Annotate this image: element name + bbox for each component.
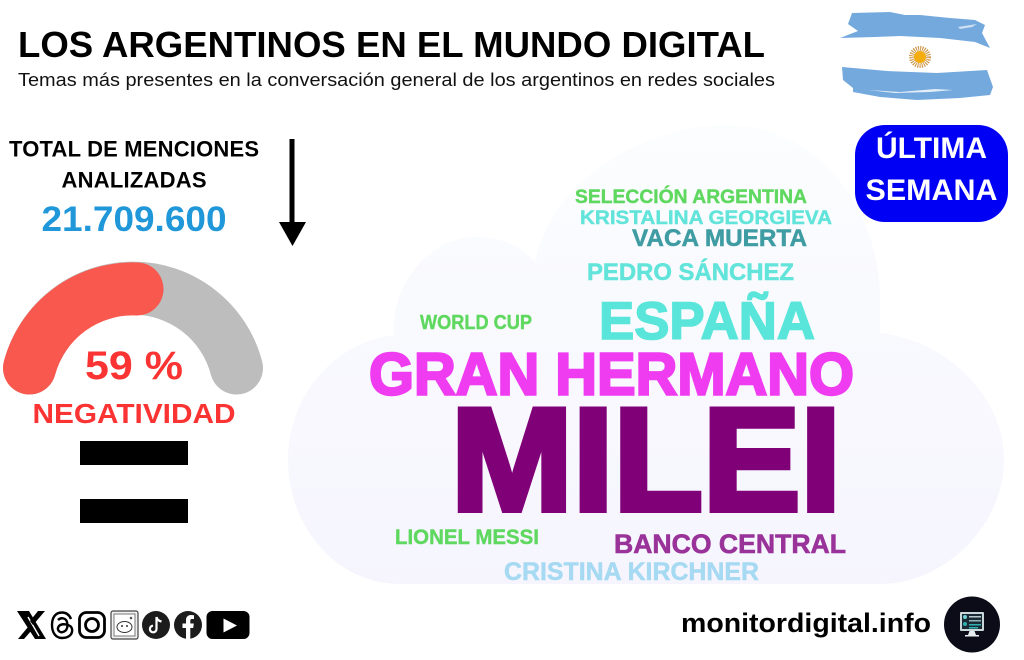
word: Lionel Messi: LIONEL MESSI <box>395 525 539 549</box>
word: Milei: MILEI <box>451 378 841 541</box>
icon: Instagram <box>80 612 104 638</box>
label: total mentions <box>9 136 259 192</box>
arrow: down <box>279 139 306 246</box>
word cloud <box>288 125 1004 586</box>
icon: TikTok <box>142 611 170 639</box>
total mentions number: 21.709.600 <box>42 200 226 239</box>
label: total mentions: TOTAL DE MENCIONES <box>9 136 259 162</box>
website link: monitordigital.info <box>681 608 931 638</box>
equals icon <box>80 441 188 523</box>
word: Gran Hermano: GRAN HERMANO <box>369 342 854 408</box>
icon: monitor logo <box>944 596 1000 652</box>
subtitle: Temas más presentes en la conversación general de los argentinos en redes sociales <box>18 69 775 90</box>
icon: X <box>17 611 46 639</box>
badge: última semana <box>855 125 1008 222</box>
icon: Facebook <box>174 611 202 639</box>
icon: Reddit <box>111 611 138 639</box>
word: Vaca Muerta: VACA MUERTA <box>632 225 807 252</box>
word: Selección Argentina: SELECCIÓN ARGENTINA <box>575 184 807 208</box>
title: LOS ARGENTINOS EN EL MUNDO DIGITAL <box>18 24 765 65</box>
word: Kristalina Georgieva: KRISTALINA GEORGIEVA <box>580 207 832 229</box>
word: Cristina Kirchner: CRISTINA KIRCHNER <box>504 558 759 586</box>
badge: última semana: SEMANA <box>866 174 998 207</box>
gauge label: NEGATIVIDAD <box>32 398 236 429</box>
label: total mentions: ANALIZADAS <box>62 168 206 192</box>
cloud shape <box>288 125 1004 584</box>
icon: sun of May <box>912 48 928 66</box>
icon: argentine flag <box>840 12 993 100</box>
badge: última semana: ÚLTIMA <box>876 131 987 165</box>
word: España: ESPAÑA <box>599 291 815 351</box>
icon: YouTube <box>206 611 250 639</box>
gauge value: 59 % <box>85 344 183 388</box>
word: World Cup: WORLD CUP <box>420 312 532 334</box>
social icons <box>17 611 250 639</box>
word: Banco Central: BANCO CENTRAL <box>614 529 846 559</box>
icon: Threads <box>52 612 72 638</box>
gauge: negativity <box>30 288 236 368</box>
word: Pedro Sánchez: PEDRO SÁNCHEZ <box>587 258 794 286</box>
